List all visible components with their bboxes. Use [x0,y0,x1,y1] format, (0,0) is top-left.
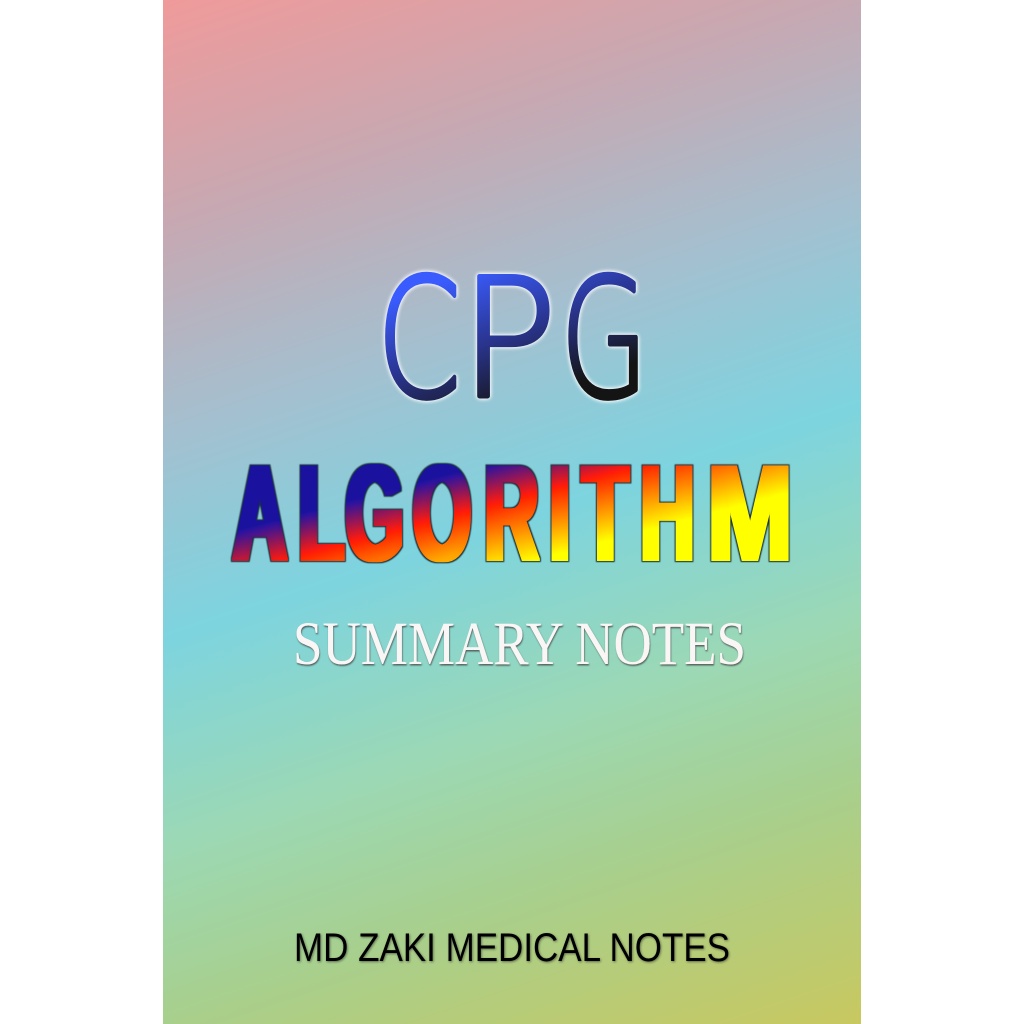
title: CPG: G [561,244,648,435]
title: CPG: P [460,244,557,435]
title: CPG: C [377,244,461,435]
author: MD Zaki Medical Notes: MD ZAKI MEDICAL NOTES [294,926,730,970]
title: CPG [377,244,648,435]
title: ALGORITHM: M [707,438,792,589]
title: ALGORITHM: ALGORITH [233,439,694,590]
background panel [163,0,861,1024]
subtitle: summary notes: SUMMARY NOTES [293,611,746,678]
